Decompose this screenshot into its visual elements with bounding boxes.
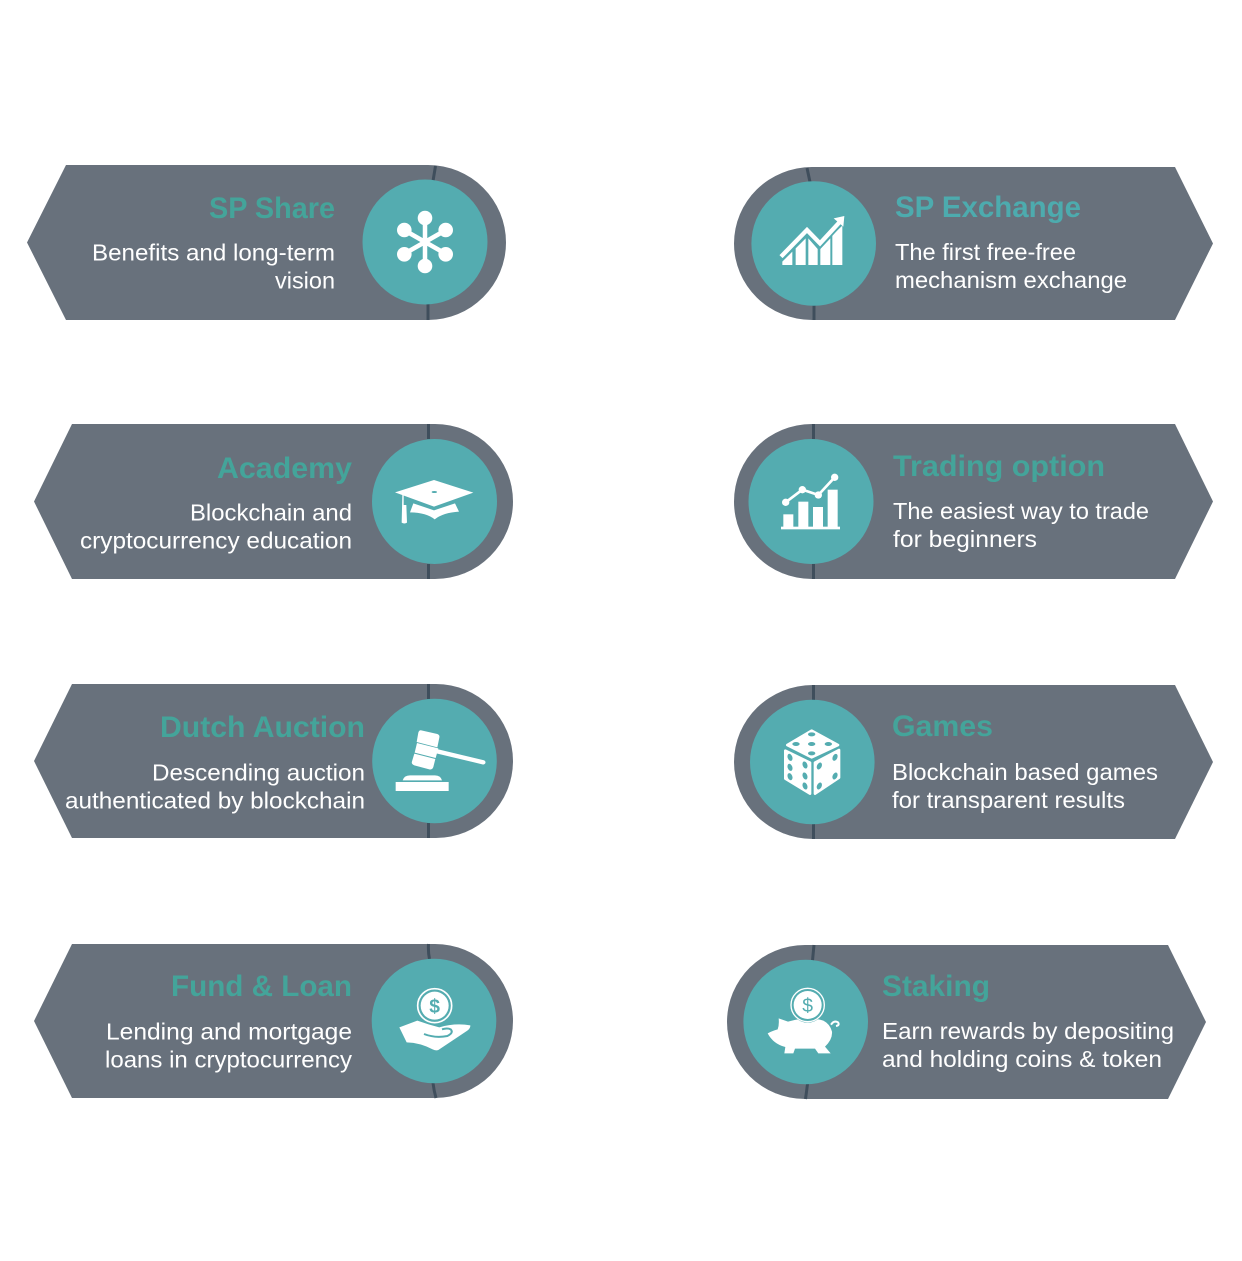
text: Academy description xyxy=(80,500,352,554)
icon: bar chart with line xyxy=(781,474,840,529)
text: SP Share description: vision xyxy=(275,268,335,294)
text: SP Exchange description: The first free-free xyxy=(895,239,1076,265)
panel: Games xyxy=(734,685,1213,839)
panel: SP Share xyxy=(27,165,506,320)
panel: Academy xyxy=(34,424,513,579)
text: Dutch Auction description xyxy=(65,760,365,814)
text: SP Exchange description xyxy=(895,239,1127,293)
text: Games description xyxy=(892,759,1158,813)
text: Trading option description: The easiest way to trade xyxy=(893,498,1149,524)
panel: Dutch Auction xyxy=(34,684,513,838)
text: Trading option description xyxy=(893,498,1149,552)
panel: Trading option xyxy=(734,424,1213,579)
text: Fund & Loan description: loans in cryptocurrency xyxy=(105,1046,352,1072)
text: Staking description: and holding coins & token xyxy=(882,1046,1162,1072)
text: Staking description: Earn rewards by depositing xyxy=(882,1018,1174,1044)
icon: piggy bank with coin xyxy=(768,987,839,1053)
heading: Dutch Auction: Dutch Auction xyxy=(160,711,365,744)
heading: Staking: Staking xyxy=(882,970,990,1003)
panel: Fund & Loan xyxy=(34,944,513,1098)
text: Fund & Loan description xyxy=(105,1018,352,1072)
heading: Fund & Loan: Fund & Loan xyxy=(171,970,352,1003)
text: Games description: Blockchain based games xyxy=(892,759,1158,785)
text: Dutch Auction description: authenticated by blockchain xyxy=(65,788,365,814)
heading: SP Share: SP Share xyxy=(209,192,335,225)
heading: SP Exchange: SP Exchange xyxy=(895,191,1081,224)
text: Fund & Loan description: Lending and mortgage xyxy=(106,1018,352,1044)
icon: piggy bank with coin: $ xyxy=(802,996,813,1017)
icon: graduation cap xyxy=(395,480,473,523)
icon: dice xyxy=(785,731,839,794)
text: SP Share description: Benefits and long-term xyxy=(92,240,335,266)
icon: rising bar chart with arrow xyxy=(781,216,844,265)
icon: gavel xyxy=(396,730,483,791)
icon: hand holding coin xyxy=(399,989,470,1050)
icon: network snowflake xyxy=(397,211,453,273)
text: Trading option description: for beginners xyxy=(893,526,1037,552)
text: Games description: for transparent results xyxy=(892,787,1125,813)
text: Staking description xyxy=(882,1018,1174,1072)
text: SP Exchange description: mechanism exchange xyxy=(895,267,1127,293)
text: SP Share description xyxy=(92,240,335,294)
text: Academy description: cryptocurrency education xyxy=(80,528,352,554)
text: Dutch Auction description: Descending auction xyxy=(152,760,365,786)
heading: Games: Games xyxy=(892,710,993,743)
panel: Staking xyxy=(727,945,1206,1099)
heading: Trading option: Trading option xyxy=(893,450,1105,483)
heading: Academy: Academy xyxy=(217,452,352,485)
icon: hand holding coin: $ xyxy=(429,996,440,1017)
text: Academy description: Blockchain and xyxy=(190,500,352,526)
panel: SP Exchange xyxy=(734,167,1213,320)
